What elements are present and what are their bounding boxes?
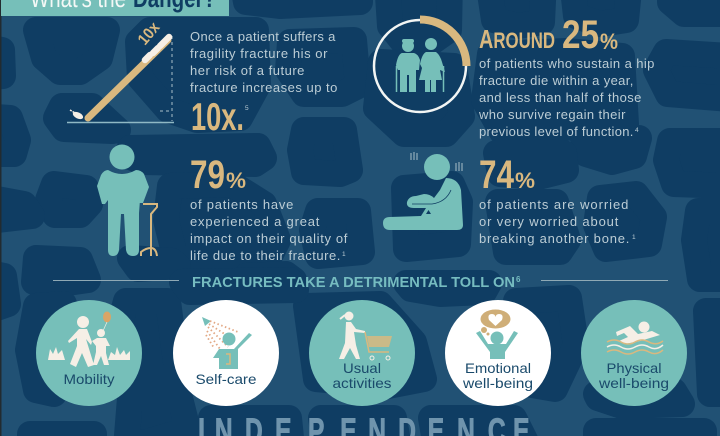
text: 79 percent: 1 — [342, 251, 346, 258]
text: 74 percent: 1 — [632, 234, 636, 241]
text: around 25 percent: and less than half of those — [479, 90, 642, 105]
text: 79 percent: of patients have — [190, 197, 294, 212]
text: future fracture risk: fragility fracture his or — [190, 46, 328, 61]
text: future fracture risk: 10x. — [191, 96, 244, 139]
text: 79 percent: experienced a great — [190, 214, 320, 229]
text: 74 percent: 74 — [479, 153, 515, 197]
panel: self-care — [173, 300, 279, 406]
icon: worried seated person — [383, 152, 463, 230]
panel: emotional well-being: well-being — [462, 375, 533, 391]
heading: detrimental toll: 6 — [516, 275, 521, 284]
text: around 25 percent — [478, 13, 655, 139]
text: around 25 percent: who survive regain their — [478, 107, 626, 122]
title banner — [1, 0, 229, 16]
panel: physical well-being: Physical — [606, 360, 662, 376]
panel: self-care: Self-care — [196, 371, 257, 387]
text: 74 percent: or very worried about — [479, 214, 619, 229]
panel: emotional well-being: Emotional — [465, 360, 531, 376]
text: 74 percent: breaking another bone. — [479, 231, 630, 246]
heading: detrimental toll: FRACTURES TAKE A DETRIMENTAL TOLL ON — [192, 274, 515, 291]
text: 79 percent: 79 — [190, 153, 225, 197]
text: around 25 percent: 4 — [635, 127, 639, 134]
text: around 25 percent: previous level of function. — [479, 124, 634, 139]
panel: usual activities: activities — [332, 375, 392, 391]
icon: rising risk bone chart: 10x — [135, 19, 164, 49]
text: 79 percent: % — [226, 168, 246, 193]
panel: mobility — [36, 300, 142, 406]
text: around 25 percent: of patients who sustain a hip — [479, 56, 655, 71]
text: 79 percent: impact on their quality of — [190, 231, 348, 246]
panel: physical well-being: well-being — [598, 375, 669, 391]
text: 74 percent — [479, 153, 636, 246]
text: around 25 percent: AROUND — [479, 24, 555, 54]
panel: emotional well-being — [445, 300, 551, 406]
text: 79 percent — [190, 153, 348, 263]
text: 79 percent: life due to their fracture. — [190, 248, 341, 263]
panel: usual activities: Usual — [343, 360, 381, 376]
heading: detrimental toll — [53, 274, 668, 291]
panel: physical well-being — [581, 300, 687, 406]
text: future fracture risk: Once a patient suffers a — [190, 29, 336, 44]
text: future fracture risk: her risk of a future — [190, 63, 305, 78]
text: future fracture risk: fracture increases up to — [190, 80, 338, 95]
panel: mobility: Mobility — [64, 371, 114, 387]
icon: elderly couple in ring — [374, 20, 466, 112]
icon: person with cane — [97, 144, 157, 256]
text: future fracture risk: 5 — [245, 105, 249, 112]
text: around 25 percent: fracture die within a year, — [479, 73, 634, 88]
icon: rising risk bone chart — [67, 19, 174, 123]
text: future fracture risk — [190, 29, 338, 139]
panel: usual activities — [309, 300, 415, 406]
text: around 25 percent: 25 — [562, 13, 599, 57]
text: 74 percent: of patients are worried — [479, 197, 629, 212]
text: 74 percent: % — [515, 168, 535, 193]
text: around 25 percent: % — [600, 29, 618, 54]
